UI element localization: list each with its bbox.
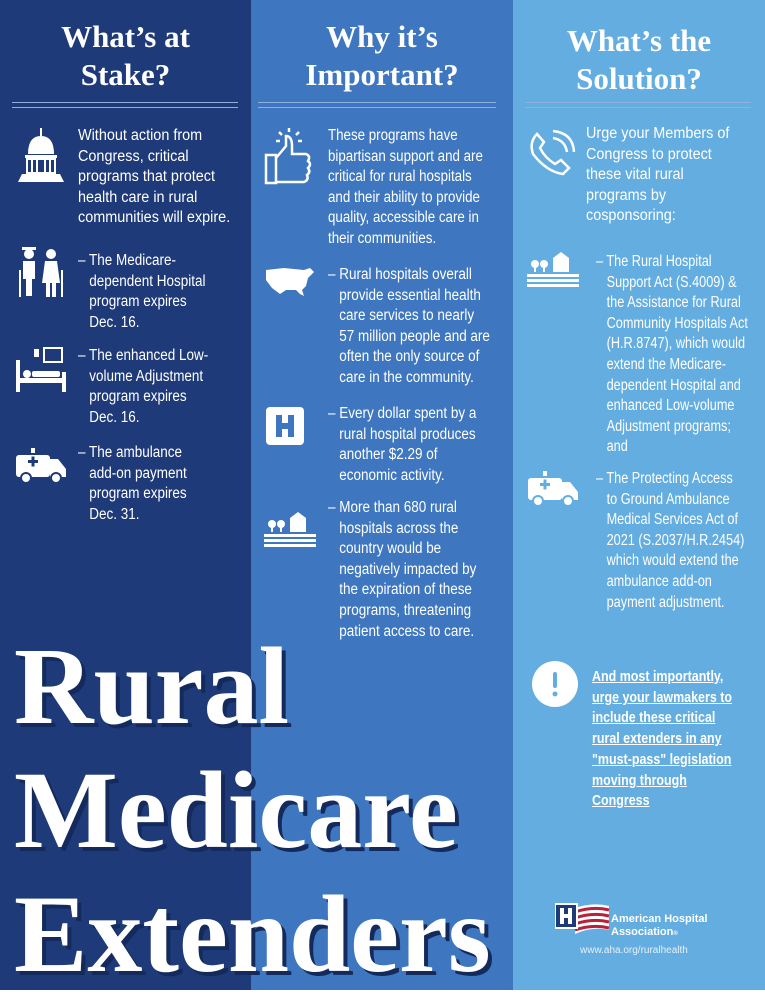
icon: capitol	[18, 128, 64, 182]
logo: AHA	[555, 903, 708, 956]
icon: hospital bed	[16, 347, 66, 392]
text: rural hospital support act: Support Act (S.4009) &	[607, 274, 737, 291]
heading: what's at stake: Stake?	[81, 57, 170, 92]
text: rural hospital support act: extend the Medicare-	[607, 356, 726, 373]
text: 57 million: care services to nearly	[339, 307, 474, 324]
text: 680 hospitals: hospitals across the	[339, 520, 458, 537]
text: urge members: Congress to protect	[586, 146, 712, 163]
text: urge members: programs by	[586, 187, 666, 204]
text: LVA: Dec. 16.	[89, 409, 139, 426]
callout: most importantly: And most importantly,	[592, 669, 723, 685]
heading: what's the solution: Solution?	[576, 61, 702, 96]
text: ambulance: – The ambulance	[78, 444, 182, 461]
text: rural hospital support act: (H.R.8747), which would	[607, 335, 745, 352]
icon: elderly couple	[19, 247, 63, 297]
heading: why it's important: Why it’s	[326, 19, 438, 54]
text: 57 million: often the only source of	[339, 348, 479, 365]
logo: AHA: www.aha.org/ruralhealth	[580, 945, 688, 956]
icon: farm	[264, 512, 316, 547]
callout: most importantly: moving through	[592, 773, 687, 789]
text: ambulance: program expires	[89, 485, 187, 502]
text: bipartisan: and their ability to provide	[328, 189, 480, 206]
text: dollar: another $2.29 of	[339, 446, 437, 463]
text: MDH: dependent Hospital	[89, 273, 205, 290]
text: ground ambulance act: – The Protecting Access	[596, 470, 733, 487]
text: ground ambulance act: payment adjustment.	[607, 594, 725, 611]
text: ground ambulance act: ambulance add-on	[607, 573, 712, 590]
logo: AHA: American Hospital	[611, 913, 708, 925]
callout: most importantly: "must-pass" legislation	[592, 752, 731, 768]
text: rural hospital support act: – The Rural Hospital	[596, 253, 712, 270]
text: ground ambulance act: which would extend the	[607, 552, 739, 569]
text: rural hospital support act: dependent Hospital and	[607, 377, 741, 394]
text: MDH	[78, 252, 205, 331]
text: rural hospital support act: the Assistance for Rural	[607, 294, 741, 311]
text: bipartisan: quality, accessible care in	[328, 209, 479, 226]
text: ambulance: add-on payment	[89, 465, 187, 482]
text: 57 million: provide essential health	[339, 287, 481, 304]
heading: what's at stake: What’s at	[61, 19, 190, 54]
text: MDH: – The Medicare-	[78, 252, 176, 269]
text: ground ambulance act	[596, 470, 744, 611]
text: urge members: Urge your Members of	[586, 125, 729, 142]
text: LVA: program expires	[89, 388, 187, 405]
icon: hospital H	[266, 407, 304, 445]
text: 57 million: 57 million people and are	[339, 328, 490, 345]
text: rural hospital support act: enhanced Low-volume	[607, 397, 734, 414]
callout: most importantly: Congress	[592, 793, 650, 809]
text: 680 hospitals: programs, threatening	[339, 602, 471, 619]
text: bipartisan	[328, 127, 483, 247]
text: urge members: these vital rural	[586, 166, 684, 183]
text: 680 hospitals: country would be	[339, 540, 441, 557]
icon: US map	[266, 268, 314, 296]
text: LVA	[78, 347, 208, 426]
icon: phone	[530, 130, 576, 176]
icon: ambulance 2	[528, 471, 578, 505]
title: rural medicare extenders	[14, 625, 492, 995]
logo: AHA: Association®	[611, 926, 678, 938]
heading: what's the solution: What’s the	[567, 23, 711, 58]
text: urge members: cosponsoring:	[586, 207, 676, 224]
text: dollar: – Every dollar spent by a	[328, 405, 476, 422]
callout: most importantly	[592, 669, 732, 809]
text: 680 hospitals: – More than 680 rural	[328, 499, 457, 516]
text: 57 million	[328, 266, 490, 386]
text: rural hospital support act: and	[607, 438, 628, 455]
text: MDH: Dec. 16.	[89, 314, 139, 331]
text: LVA: volume Adjustment	[89, 368, 203, 385]
callout: most importantly: include these critical	[592, 710, 715, 726]
text: bipartisan: These programs have	[328, 127, 458, 144]
text: 680 hospitals	[328, 499, 476, 640]
heading: why it's important: Important?	[305, 57, 459, 92]
text: dollar: economic activity.	[339, 467, 445, 484]
text: without action: Congress, critical	[78, 148, 189, 165]
text: bipartisan: bipartisan support and are	[328, 148, 483, 165]
text: dollar	[328, 405, 476, 484]
text: 680 hospitals: patient access to care.	[339, 623, 474, 640]
title: rural medicare extenders: Medicare	[14, 749, 458, 871]
text: MDH: program expires	[89, 293, 187, 310]
heading: why it's important	[305, 19, 459, 92]
text: without action	[78, 127, 230, 226]
text: LVA: – The enhanced Low-	[78, 347, 208, 364]
icon: thumbs up	[264, 128, 312, 184]
text: dollar: rural hospital produces	[339, 426, 476, 443]
text: bipartisan: their communities.	[328, 230, 436, 247]
text: without action: health care in rural	[78, 189, 197, 206]
text: urge members	[586, 125, 730, 224]
title: rural medicare extenders: Extenders	[14, 873, 491, 995]
text: ground ambulance act: to Ground Ambulance	[607, 491, 730, 508]
icon: ambulance	[16, 448, 66, 482]
text: 680 hospitals: negatively impacted by	[339, 561, 476, 578]
text: rural hospital support act: Community Hospitals Act	[607, 315, 748, 332]
callout: most importantly: rural extenders in any	[592, 731, 722, 747]
text: without action: programs that protect	[78, 168, 215, 185]
text: ambulance	[78, 444, 187, 523]
text: without action: communities will expire.	[78, 209, 230, 226]
icon: exclamation	[532, 661, 578, 707]
heading: what's the solution	[567, 23, 711, 96]
text: 680 hospitals: the expiration of these	[339, 581, 472, 598]
text: ambulance: Dec. 31.	[89, 506, 139, 523]
heading: what's at stake	[61, 19, 190, 92]
text: ground ambulance act: 2021 (S.2037/H.R.2454)	[607, 532, 744, 549]
text: without action: Without action from	[78, 127, 202, 144]
text: rural hospital support act: Adjustment programs;	[607, 418, 731, 435]
text: 57 million: – Rural hospitals overall	[328, 266, 472, 283]
callout: most importantly: urge your lawmakers to	[592, 690, 732, 706]
title: rural medicare extenders: Rural	[14, 625, 289, 747]
text: bipartisan: critical for rural hospitals	[328, 168, 472, 185]
icon: farm 2	[527, 252, 579, 287]
text: rural hospital support act	[596, 253, 748, 455]
text: 57 million: care in the community.	[339, 369, 474, 386]
text: ground ambulance act: Medical Services Act of	[607, 511, 738, 528]
